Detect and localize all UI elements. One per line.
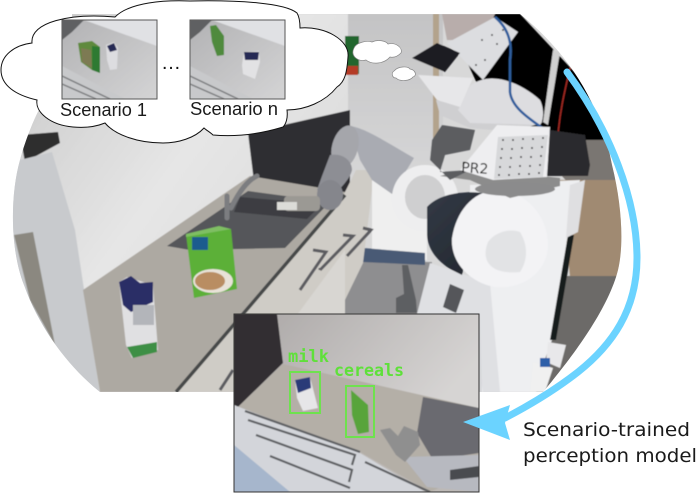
scenario n thumbnail bbox=[190, 20, 285, 99]
perforated plate bbox=[494, 135, 548, 179]
sink and drainer bbox=[167, 191, 330, 250]
robot shoulder bbox=[392, 165, 560, 287]
scenario 1 thumbnail bbox=[62, 20, 157, 99]
ellipsis between scenarios: … bbox=[161, 52, 181, 74]
detection box: cereals bbox=[346, 386, 374, 437]
worktop bbox=[83, 176, 345, 392]
detection box: milk bbox=[290, 372, 320, 413]
cereal box on worktop bbox=[186, 226, 237, 298]
objects on shelf behind thought bubble bbox=[345, 36, 359, 74]
robot head mount bbox=[458, 79, 543, 125]
aluminium rail bbox=[543, 50, 560, 125]
robot grippers at torso bbox=[430, 125, 475, 180]
robot left arm bbox=[277, 122, 414, 211]
thought cloud bbox=[1, 1, 348, 143]
small thought bubble small bbox=[392, 67, 415, 81]
robot torso and base bbox=[417, 180, 585, 392]
robot neck bbox=[436, 100, 543, 132]
label: scenario-trained perception model: perception model bbox=[523, 445, 697, 467]
detection label: milk: milk bbox=[288, 347, 329, 367]
red wire bbox=[558, 68, 570, 135]
label: scenario-trained perception model: Scenario-trained bbox=[523, 419, 690, 441]
caption: scenario n: Scenario n bbox=[190, 98, 278, 119]
gripper object on floor bbox=[396, 265, 417, 313]
skirting board bbox=[363, 248, 425, 265]
panel: kitchen and robot photograph bbox=[12, 14, 622, 392]
caption: scenario 1: Scenario 1 bbox=[60, 99, 147, 120]
robot head with sensor holes bbox=[447, 17, 518, 80]
detection label: cereals: cereals bbox=[334, 361, 404, 381]
worktop edge and handles bbox=[176, 195, 345, 392]
blue cable bbox=[495, 17, 552, 135]
dark splashback bbox=[248, 110, 350, 197]
cabinet fronts bbox=[174, 170, 372, 392]
wall shelf bbox=[22, 132, 60, 160]
arrow: from robot to inset bbox=[463, 72, 637, 440]
head camera box bbox=[412, 43, 460, 72]
tall left cabinet bbox=[13, 152, 100, 392]
panel: detection inset photo bbox=[234, 314, 479, 492]
tap bbox=[227, 176, 257, 218]
torso disc bbox=[474, 184, 556, 196]
PR2 label: PR2 bbox=[461, 160, 489, 178]
kitchen scene bbox=[0, 14, 630, 400]
small thought bubble large bbox=[353, 41, 401, 63]
floor bbox=[345, 262, 432, 314]
torso electronics bbox=[545, 130, 590, 176]
torso block with PR2 label bbox=[460, 125, 550, 180]
milk carton on worktop bbox=[119, 276, 158, 358]
